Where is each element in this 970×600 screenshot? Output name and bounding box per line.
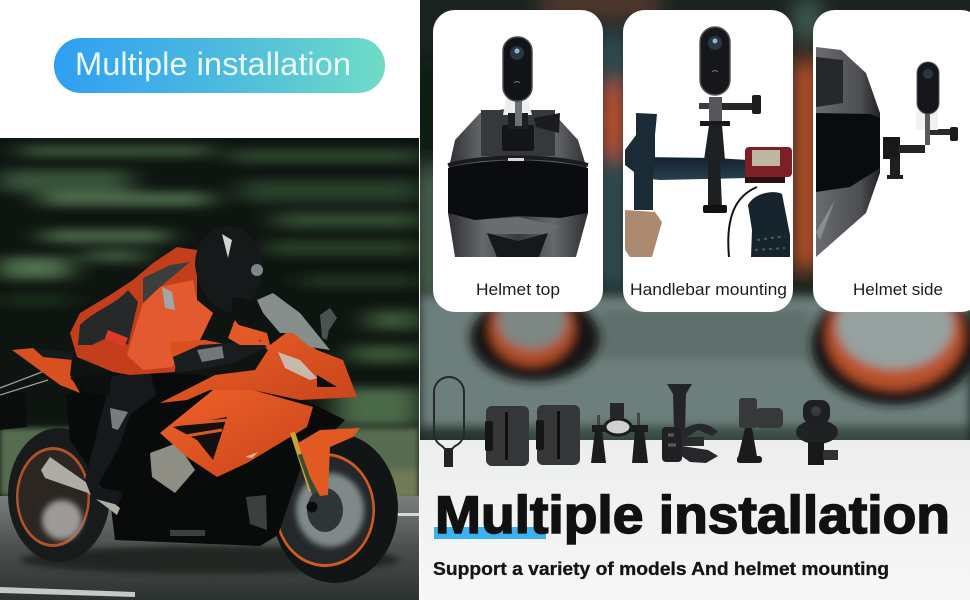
badge: Multiple installation pill [54,38,385,93]
card: Helmet side [813,10,970,312]
icon: handlebar clamp and knob [699,95,761,213]
bike frame and engine [41,370,345,546]
orange lower fairing [160,390,313,477]
accessories row [434,377,838,467]
label: Helmet side [853,281,943,299]
road [0,496,419,600]
rear subframe and plate [0,372,48,430]
boot and leg [85,372,156,505]
rider suit [70,247,213,375]
card: Helmet top [433,10,603,312]
tail section [12,348,110,395]
icon: handlebar [625,113,748,210]
icon: mount on helmet [502,99,560,151]
badge: Multiple installation pill: Multiple installation [75,46,351,82]
icon: action camera [503,37,532,101]
blue underline accent [434,527,546,539]
gloves and handlebar [173,320,268,373]
icon: right-angle adapter [737,398,783,463]
icon: handlebar clamp [591,403,648,463]
card: Handlebar mounting [623,10,793,312]
panel: bottom white area [420,440,970,600]
rider helmet [195,226,264,314]
icon: hand [625,210,662,257]
label: Handlebar mounting [630,281,787,299]
icon: ball mount base [796,400,838,465]
icon: action camera [917,62,939,114]
icon: adhesive base 2 [536,405,580,465]
icon: helmet front view [448,107,588,257]
icon: helmet side view [816,47,880,257]
front fender and fork [290,428,360,496]
tank [170,340,222,360]
icon: adhesive base 1 [485,406,529,466]
heading: Multiple installation: Multiple installation [435,486,950,545]
icon: long screw with clamp [662,384,718,463]
front wheel [272,433,398,583]
subheading: Support a variety of models And helmet mounting [433,558,889,579]
icon: action camera [700,27,730,95]
icon: side mount [883,112,958,179]
photo: blurred motorcycle background [420,0,970,445]
icon: bike computer [728,147,792,257]
rear wheel [8,428,110,562]
photo: motorcycle rider [0,138,420,600]
icon: camera frame loop [434,377,464,467]
label: Helmet top [476,281,560,299]
orange upper fairing [160,293,357,403]
motion-blurred foliage background [0,138,419,496]
